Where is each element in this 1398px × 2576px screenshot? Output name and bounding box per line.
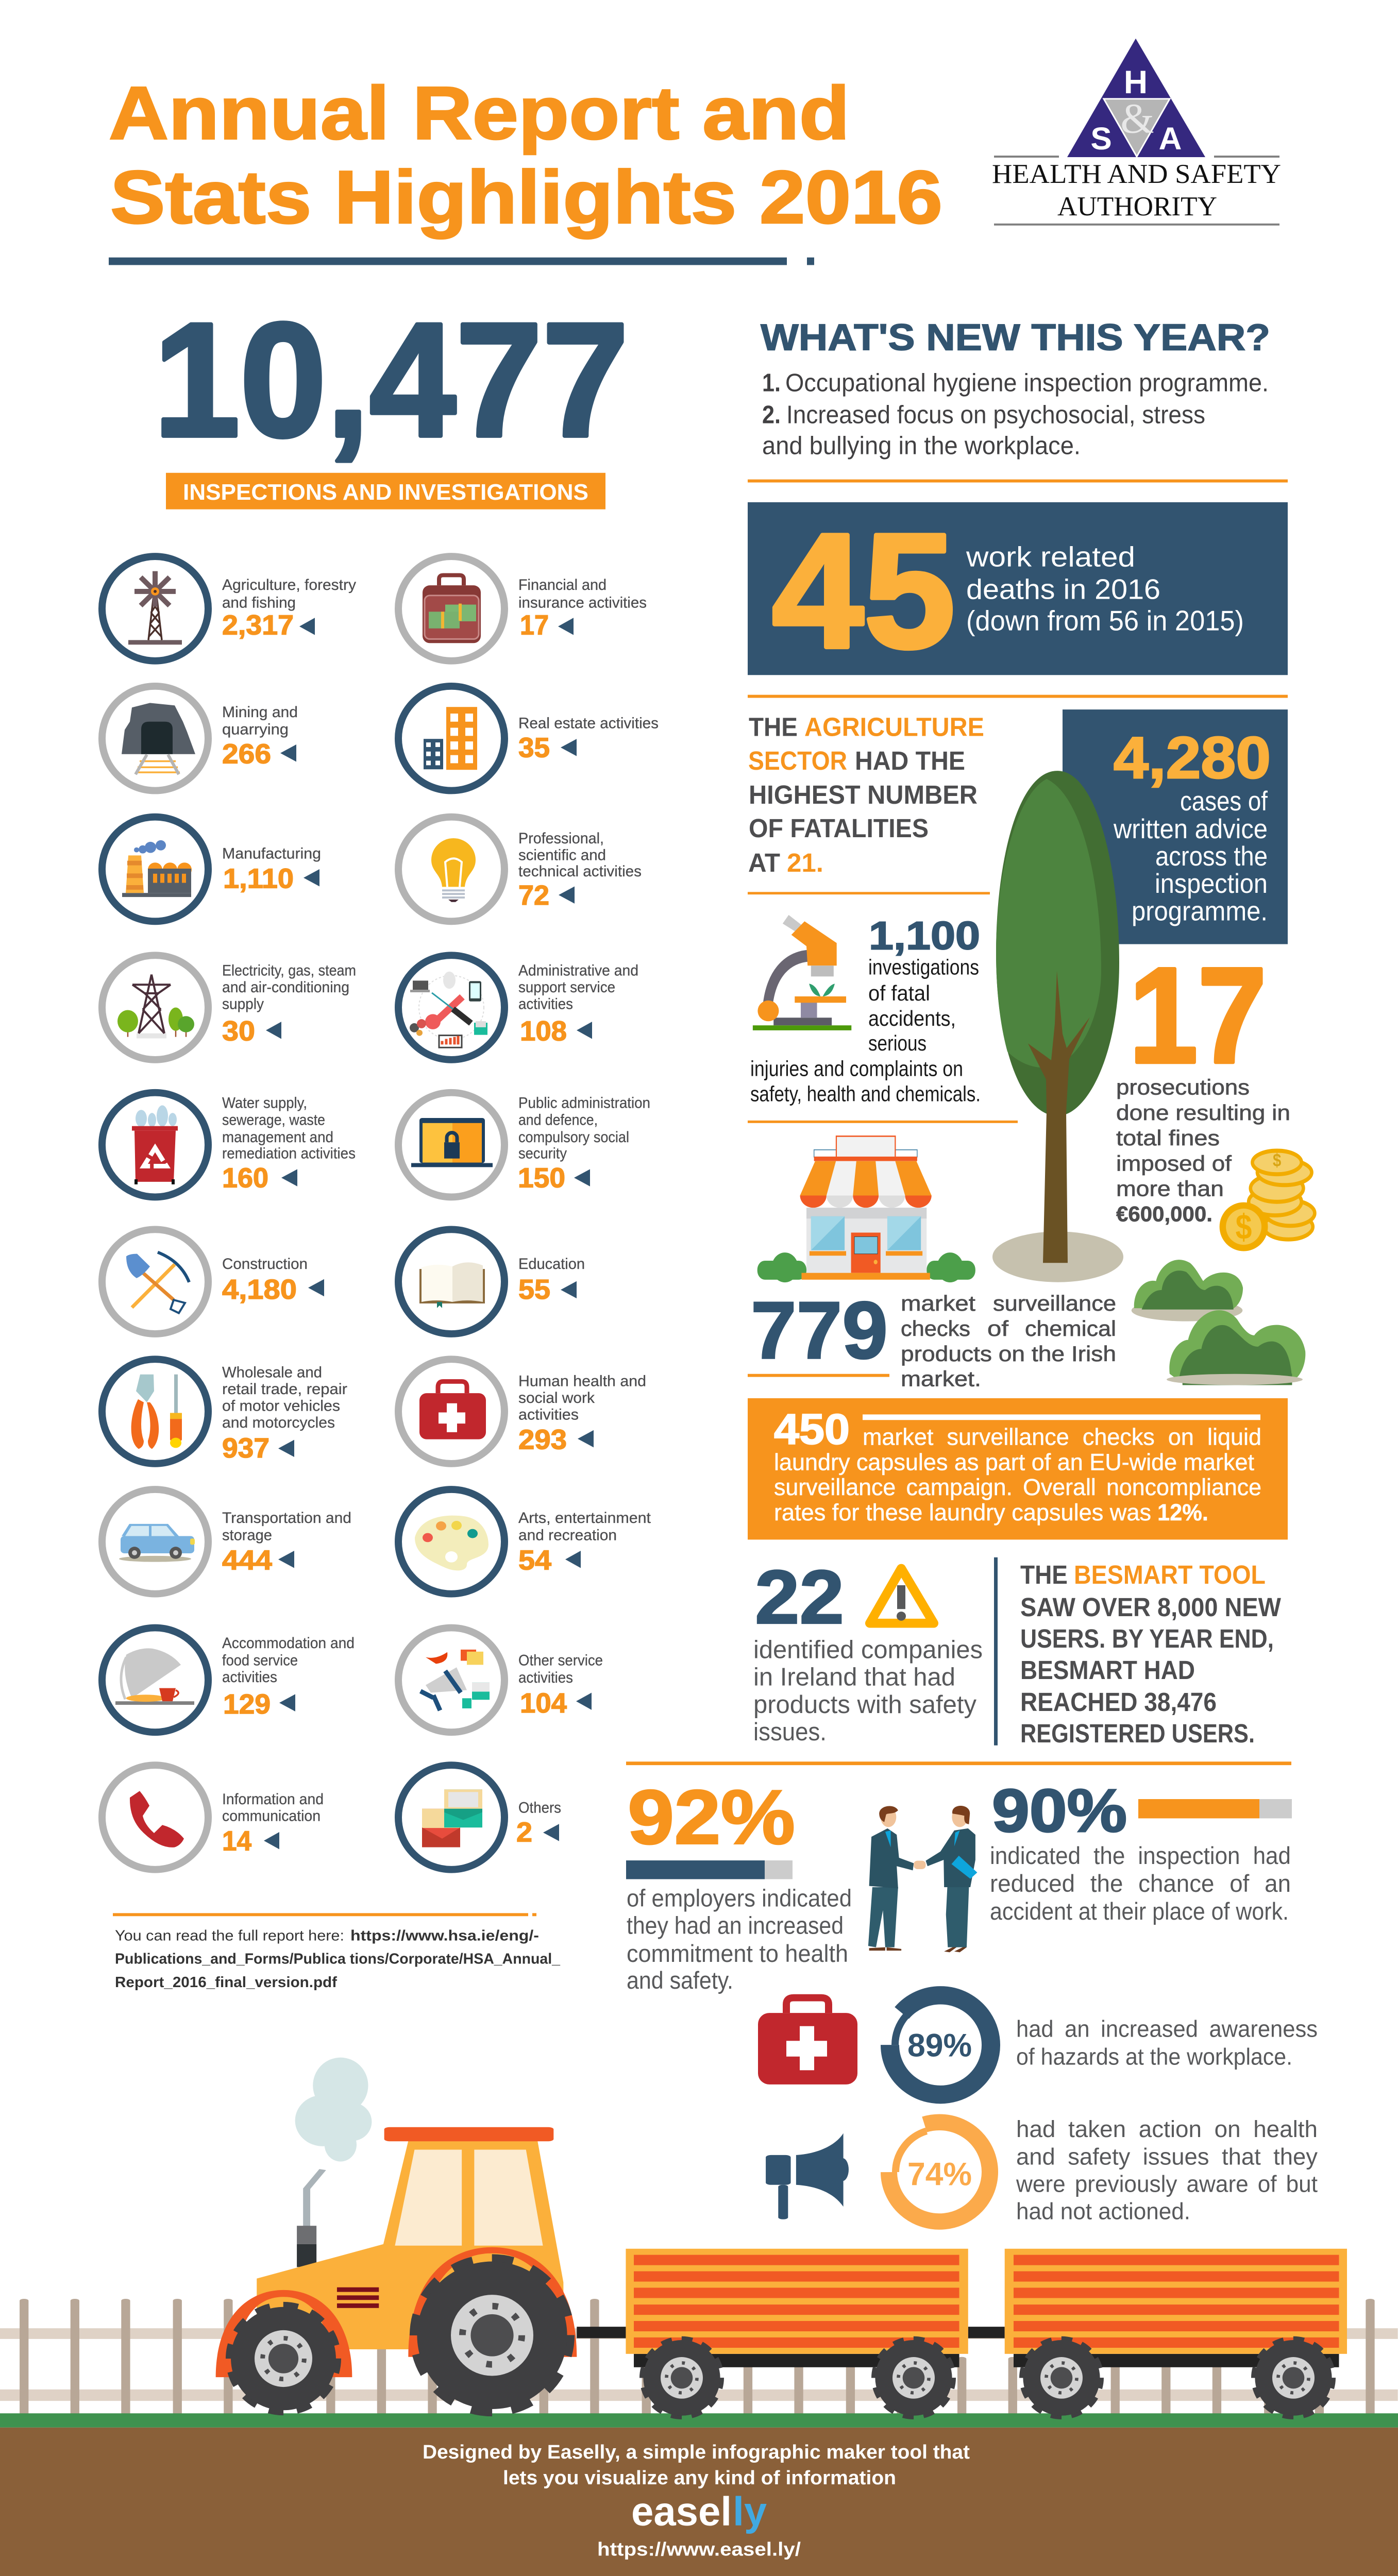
count: 4,180	[222, 1274, 297, 1305]
count: 72	[518, 879, 549, 911]
label: sewerage, waste	[222, 1112, 325, 1129]
advice text: across the	[1155, 841, 1268, 872]
credit text: lets you visualize any kind of information	[503, 2467, 896, 2489]
label	[518, 1095, 650, 1162]
title underline	[109, 258, 814, 265]
label: Others	[518, 1800, 561, 1817]
label	[222, 1635, 355, 1686]
label	[518, 962, 638, 1012]
action text	[1016, 2116, 1318, 2224]
employers text: commitment to health	[627, 1940, 848, 1968]
laundry capsules text: market surveillance checks on liquid	[863, 1424, 1261, 1450]
label: Accommodation and	[222, 1635, 355, 1652]
panel: 4,280 written advice	[1063, 709, 1288, 944]
companies text: identified companies	[753, 1635, 983, 1664]
item: wholesale	[102, 1359, 347, 1464]
trailers	[577, 2249, 1347, 2367]
icon: windmill	[102, 556, 208, 661]
icon: shop	[757, 1136, 975, 1282]
market checks text: surveillance	[993, 1291, 1116, 1315]
advice text	[1113, 786, 1268, 926]
label: management and	[222, 1129, 333, 1146]
laundry capsules text: surveillance campaign. Overall noncompliance	[774, 1474, 1261, 1500]
easelly url: https://www.easel.ly/	[597, 2538, 801, 2560]
panel: agriculture sector fatalities: AT	[748, 848, 780, 877]
progress bar 92	[626, 1860, 793, 1879]
icon: warning triangle	[870, 1568, 934, 1623]
label: Administrative and	[518, 962, 638, 979]
accident text	[990, 1842, 1291, 1925]
panel: what's new this year	[761, 316, 1270, 460]
count: 2,317	[222, 609, 294, 640]
arrow	[576, 1692, 592, 1710]
full report link: https://www.hsa.ie/eng/-	[350, 1928, 539, 1944]
awareness text	[1016, 2016, 1318, 2070]
advice text: programme.	[1132, 896, 1268, 926]
prosecutions text: prosecutions	[1116, 1075, 1250, 1099]
label: food service	[222, 1652, 298, 1669]
count: 17	[520, 609, 549, 640]
icon: envelopes	[398, 1765, 504, 1870]
label: Arts, entertainment	[518, 1510, 651, 1527]
advice text: cases of	[1180, 786, 1268, 817]
icon: telephone handset	[102, 1765, 208, 1870]
logo: Health and Safety Authority: HEALTH AND SAFETY	[992, 159, 1281, 189]
icon: light bulb	[398, 817, 504, 921]
label: insurance activities	[518, 595, 647, 611]
item: electricity	[102, 955, 356, 1060]
market checks text: market	[901, 1291, 975, 1315]
label: and air-conditioning	[222, 979, 349, 996]
inspections label: INSPECTIONS AND INVESTIGATIONS	[183, 480, 588, 505]
label: and fishing	[222, 595, 296, 611]
label: compulsory social	[518, 1129, 629, 1146]
panel: BeSMART tool: REGISTERED USERS.	[1020, 1718, 1255, 1748]
investigations text: injuries and complaints on	[750, 1057, 963, 1080]
arrow	[561, 1281, 577, 1298]
item: arts	[398, 1489, 651, 1594]
new items list: Occupational hygiene inspection programme.	[785, 368, 1269, 397]
icon: microscope	[753, 915, 851, 1030]
label: Human health and	[518, 1373, 646, 1389]
new items list: 2.	[762, 400, 781, 429]
item: transportation	[102, 1489, 351, 1594]
fence	[0, 2301, 1398, 2413]
easelly logo wordmark: ly	[733, 2488, 767, 2534]
icon: first aid kit	[758, 1998, 857, 2084]
label: Agriculture, forestry	[222, 577, 356, 594]
panel: BeSMART tool: BESMART TOOL	[1074, 1560, 1266, 1589]
arrow	[279, 1694, 295, 1711]
count: 1,110	[223, 863, 294, 894]
market checks text: market.	[901, 1367, 981, 1391]
panel: 92 percent of employers: 92%	[628, 1774, 795, 1860]
panel: 90 percent accident chance	[990, 1777, 1292, 1925]
label: support service	[518, 979, 615, 996]
title: Stats Highlights 2016	[110, 156, 942, 240]
label	[222, 1510, 351, 1544]
panel: agriculture sector fatalities: HAD THE	[855, 746, 965, 775]
prosecutions text: done resulting in	[1116, 1100, 1290, 1125]
companies text: in Ireland that had	[753, 1663, 955, 1691]
arrow	[266, 1022, 281, 1039]
label: Professional,	[518, 830, 604, 847]
count: 150	[518, 1162, 565, 1194]
label: Public administration	[518, 1095, 650, 1111]
label: Real estate activities	[518, 715, 659, 732]
logo: Health and Safety Authority: A	[1159, 122, 1182, 157]
count: 108	[520, 1015, 567, 1046]
count: 129	[223, 1688, 271, 1720]
label	[518, 577, 647, 611]
icon: buildings	[398, 686, 504, 791]
label	[518, 1373, 646, 1423]
logo: Health and Safety Authority	[992, 39, 1281, 226]
arrow	[299, 618, 315, 635]
panel: 450 laundry capsules	[748, 1398, 1288, 1539]
icon: tunnel	[102, 686, 208, 791]
logo: Health and Safety Authority: AUTHORITY	[1057, 191, 1217, 222]
label: activities	[518, 1406, 579, 1423]
label: activities	[222, 1669, 277, 1686]
label: Mining and	[222, 704, 298, 721]
awareness text: of hazards at the workplace.	[1016, 2044, 1292, 2070]
label: Electricity, gas, steam	[222, 962, 356, 979]
panel: 22 companies	[753, 1554, 983, 1746]
icon: pliers and screwdriver	[102, 1359, 208, 1464]
label: Other service	[518, 1652, 603, 1669]
label: and defence,	[518, 1112, 598, 1129]
number 4,280: 4,280	[1114, 725, 1271, 791]
icon: bushes	[1132, 1260, 1305, 1385]
label: communication	[222, 1808, 321, 1824]
panel: agriculture sector fatalities: OF FATALITIES	[749, 813, 929, 843]
count: 54	[518, 1545, 552, 1575]
label	[518, 1652, 603, 1686]
chart: 89 percent ring	[890, 1995, 991, 2095]
panel: BeSMART tool: BESMART HAD	[1020, 1655, 1195, 1685]
icon: car	[102, 1489, 208, 1594]
arrow	[308, 1279, 324, 1296]
investigations text: serious	[868, 1031, 927, 1055]
label: Transportation and	[222, 1510, 351, 1527]
chart: 74 percent ring	[889, 2122, 990, 2222]
icon: medical case	[398, 1359, 504, 1464]
count: 160	[222, 1162, 268, 1194]
panel: BeSMART tool: SAW OVER 8,000 NEW	[1020, 1592, 1281, 1622]
item: agriculture	[102, 556, 356, 661]
arrow	[304, 869, 319, 886]
headline number 10,477: 10,477	[154, 290, 629, 470]
full report link: Report_2016_final_version.pdf	[115, 1974, 337, 1991]
icon: coins: $	[1236, 1208, 1252, 1247]
icon: paint palette	[398, 1489, 504, 1594]
count: 55	[518, 1274, 550, 1305]
investigations text: investigations	[868, 955, 979, 979]
count: 14	[222, 1825, 252, 1856]
item: financial	[398, 556, 647, 661]
label: Information and	[222, 1791, 324, 1808]
label: technical activities	[518, 863, 642, 880]
label: and recreation	[518, 1527, 617, 1544]
label: Financial and	[518, 577, 607, 594]
label: activities	[518, 996, 573, 1012]
deaths text: (down from 56 in 2015)	[966, 605, 1244, 637]
item: manufacturing	[102, 817, 321, 921]
arrow	[574, 1169, 590, 1187]
icon: pylon and trees	[102, 955, 208, 1060]
deaths text: work related	[966, 541, 1135, 573]
panel: 1,100 investigations	[750, 914, 981, 1106]
arrow	[577, 1022, 592, 1039]
count: 35	[518, 732, 550, 764]
icon: book	[398, 1229, 504, 1334]
count: 293	[518, 1424, 567, 1455]
label: Wholesale and	[222, 1364, 322, 1381]
item: other services	[398, 1628, 603, 1732]
panel: 779 market checks	[751, 1284, 1116, 1391]
prosecutions text: imposed of	[1116, 1151, 1232, 1175]
market checks text: of	[987, 1316, 1009, 1341]
label: activities	[518, 1669, 573, 1686]
item: administrative	[398, 955, 638, 1060]
easelly logo wordmark: easel	[631, 2488, 732, 2534]
laundry capsules text: 12%.	[1157, 1499, 1208, 1526]
label	[518, 1510, 651, 1544]
employers text: and safety.	[627, 1967, 733, 1994]
companies text: products with safety	[753, 1690, 976, 1719]
label: supply	[222, 996, 264, 1012]
label: retail trade, repair	[222, 1381, 347, 1398]
label: quarrying	[222, 721, 289, 738]
panel: 92 percent of employers	[626, 1774, 852, 1994]
tractor	[216, 2058, 577, 2413]
arrow	[561, 739, 577, 756]
arrow	[281, 1169, 297, 1187]
arrow	[578, 1430, 594, 1447]
panel: 17 prosecutions	[1116, 940, 1290, 1226]
investigations text: safety, health and chemicals.	[750, 1082, 981, 1106]
item: real estate	[398, 686, 659, 791]
icon: laptop with padlock	[398, 1093, 504, 1197]
new items list: 1.	[762, 368, 781, 397]
count: 2	[516, 1817, 532, 1848]
panel: BeSMART tool	[1020, 1560, 1281, 1748]
arrow	[280, 744, 296, 761]
deaths text: deaths in 2016	[966, 573, 1160, 605]
deaths text	[966, 541, 1244, 637]
arrow	[558, 618, 574, 635]
panel: 45 work related deaths	[748, 500, 1288, 682]
item: human health	[398, 1359, 646, 1464]
full report link: You can read the full report here:	[115, 1928, 344, 1944]
label	[222, 962, 356, 1012]
item: education	[398, 1229, 585, 1334]
item: professional	[398, 817, 642, 921]
employers text	[627, 1885, 852, 1994]
laundry capsules text: laundry capsules as part of an EU-wide market	[774, 1449, 1254, 1476]
companies text	[753, 1635, 983, 1746]
prosecutions text: more than	[1116, 1177, 1224, 1200]
panel: agriculture sector fatalities	[748, 712, 984, 877]
panel: agriculture sector fatalities: HIGHEST NUMBER	[749, 779, 978, 809]
market checks text	[901, 1291, 1116, 1391]
arrow	[565, 1551, 581, 1568]
employers text: they had an increased	[627, 1912, 844, 1940]
label	[518, 830, 642, 880]
action text: were previously aware of but	[1016, 2171, 1318, 2197]
arrow	[278, 1551, 294, 1568]
panel: agriculture sector fatalities: 21.	[787, 848, 823, 877]
chart: 89 percent ring: 89%	[907, 2028, 972, 2064]
icon: megaphone and messages	[398, 1628, 504, 1732]
icon: coins	[1220, 1150, 1315, 1251]
investigations text: accidents,	[868, 1006, 956, 1030]
market checks text: products on the Irish	[901, 1342, 1116, 1366]
item: accommodation	[102, 1628, 355, 1732]
action text: had not actioned.	[1016, 2198, 1190, 2224]
action text: and safety issues that they	[1016, 2144, 1318, 2170]
panel: agriculture sector fatalities: THE	[749, 712, 798, 741]
credit text: Designed by Easelly, a simple infographic maker tool that	[423, 2441, 970, 2463]
label	[222, 1791, 324, 1824]
market checks text: checks	[901, 1316, 970, 1341]
count: 104	[520, 1687, 567, 1719]
prosecutions text	[1116, 1075, 1290, 1226]
label	[222, 1364, 347, 1431]
arrow	[264, 1832, 279, 1849]
count: 30	[222, 1015, 255, 1046]
icon: megaphone	[766, 2133, 849, 2219]
label: Education	[518, 1256, 585, 1273]
new items list: and bullying in the workplace.	[762, 431, 1081, 460]
label	[222, 577, 356, 611]
heading: WHAT'S NEW THIS YEAR?	[761, 316, 1270, 359]
panel: 779 market checks: 779	[751, 1284, 888, 1376]
label: Manufacturing	[222, 845, 321, 862]
logo: Health and Safety Authority: S	[1090, 122, 1112, 157]
panel: agriculture sector fatalities: SECTOR	[748, 746, 847, 775]
arrow	[559, 886, 575, 904]
label: and motorcycles	[222, 1414, 335, 1431]
item: information	[102, 1765, 324, 1870]
count: 266	[222, 738, 271, 769]
icon: two businessmen shaking hands	[868, 1806, 977, 1952]
panel: 450 laundry capsules: 450	[774, 1405, 850, 1453]
awareness text: had an increased awareness	[1016, 2016, 1318, 2042]
label: security	[518, 1145, 567, 1162]
item: mining	[102, 686, 298, 791]
item: construction	[102, 1229, 324, 1334]
prosecutions text: total fines	[1116, 1126, 1220, 1150]
icon: factory	[102, 817, 208, 921]
label: social work	[518, 1389, 595, 1406]
label	[222, 1095, 356, 1162]
action text: had taken action on health	[1016, 2116, 1318, 2142]
advice text: written advice	[1113, 814, 1268, 844]
icon: recycling bin	[102, 1093, 208, 1197]
count: 937	[222, 1432, 270, 1464]
market checks text: chemical	[1025, 1316, 1116, 1341]
label	[222, 704, 298, 738]
number 45: 45	[772, 500, 955, 682]
item: water supply	[102, 1093, 356, 1197]
icon: coins: $	[1273, 1150, 1281, 1171]
panel: BeSMART tool: THE	[1020, 1560, 1068, 1589]
companies text: issues.	[753, 1717, 827, 1746]
logo: Health and Safety Authority: H	[1124, 64, 1148, 100]
icon: food cloche	[102, 1628, 208, 1732]
new items list	[762, 368, 1269, 460]
credit text	[423, 2441, 970, 2489]
panel: 22 companies: 22	[755, 1554, 844, 1639]
panel: 90 percent accident chance: 90%	[992, 1777, 1127, 1845]
panel: 17 prosecutions: 17	[1129, 940, 1267, 1091]
ground	[0, 2413, 1398, 2576]
label: scientific and	[518, 847, 606, 863]
employers text: of employers indicated	[627, 1885, 852, 1912]
trailer wheels	[642, 2338, 1334, 2417]
accident text: accident at their place of work.	[990, 1898, 1289, 1925]
advice text: inspection	[1155, 869, 1268, 899]
label: remediation activities	[222, 1145, 356, 1162]
title: Annual Report and	[109, 72, 850, 155]
progress bar 90	[1138, 1799, 1292, 1818]
icon: tools and devices	[398, 955, 504, 1060]
investigations text	[750, 955, 981, 1106]
laundry capsules text: rates for these laundry capsules was	[774, 1499, 1151, 1526]
accident text: reduced the chance of an	[990, 1870, 1291, 1897]
investigations text: of fatal	[868, 981, 930, 1005]
icon: briefcase	[398, 556, 504, 661]
arrow	[278, 1440, 294, 1457]
full report link	[115, 1928, 561, 1991]
prosecutions text: €600,000.	[1116, 1202, 1212, 1226]
new items list: Increased focus on psychosocial, stress	[786, 400, 1205, 429]
title	[109, 72, 942, 240]
label: storage	[222, 1527, 272, 1544]
logo: Health and Safety Authority: &	[1120, 95, 1154, 143]
label: of motor vehicles	[222, 1398, 340, 1414]
list: sector inspection counts	[102, 556, 659, 1870]
chart: 74 percent ring: 74%	[907, 2157, 972, 2192]
panel: agriculture sector fatalities: AGRICULTURE	[804, 712, 984, 741]
inspections label	[166, 473, 605, 510]
full report link: Publications_and_Forms/Publica tions/Corporate/HSA_Annual_	[115, 1951, 561, 1968]
panel: BeSMART tool: USERS. BY YEAR END,	[1020, 1623, 1274, 1653]
arrow	[543, 1824, 559, 1841]
panel: BeSMART tool: REACHED 38,476	[1020, 1687, 1217, 1717]
label: Construction	[222, 1256, 308, 1273]
accident text: indicated the inspection had	[990, 1842, 1291, 1870]
panel: 1,100 investigations: 1,100	[869, 914, 980, 958]
laundry capsules text	[774, 1424, 1261, 1526]
icon: shovel and pickaxe	[102, 1229, 208, 1334]
item: public administration	[398, 1093, 650, 1197]
item: others	[398, 1765, 561, 1870]
label: Water supply,	[222, 1095, 307, 1111]
count: 444	[222, 1545, 273, 1575]
footer credit	[423, 2441, 970, 2560]
icon: tree	[992, 771, 1123, 1282]
